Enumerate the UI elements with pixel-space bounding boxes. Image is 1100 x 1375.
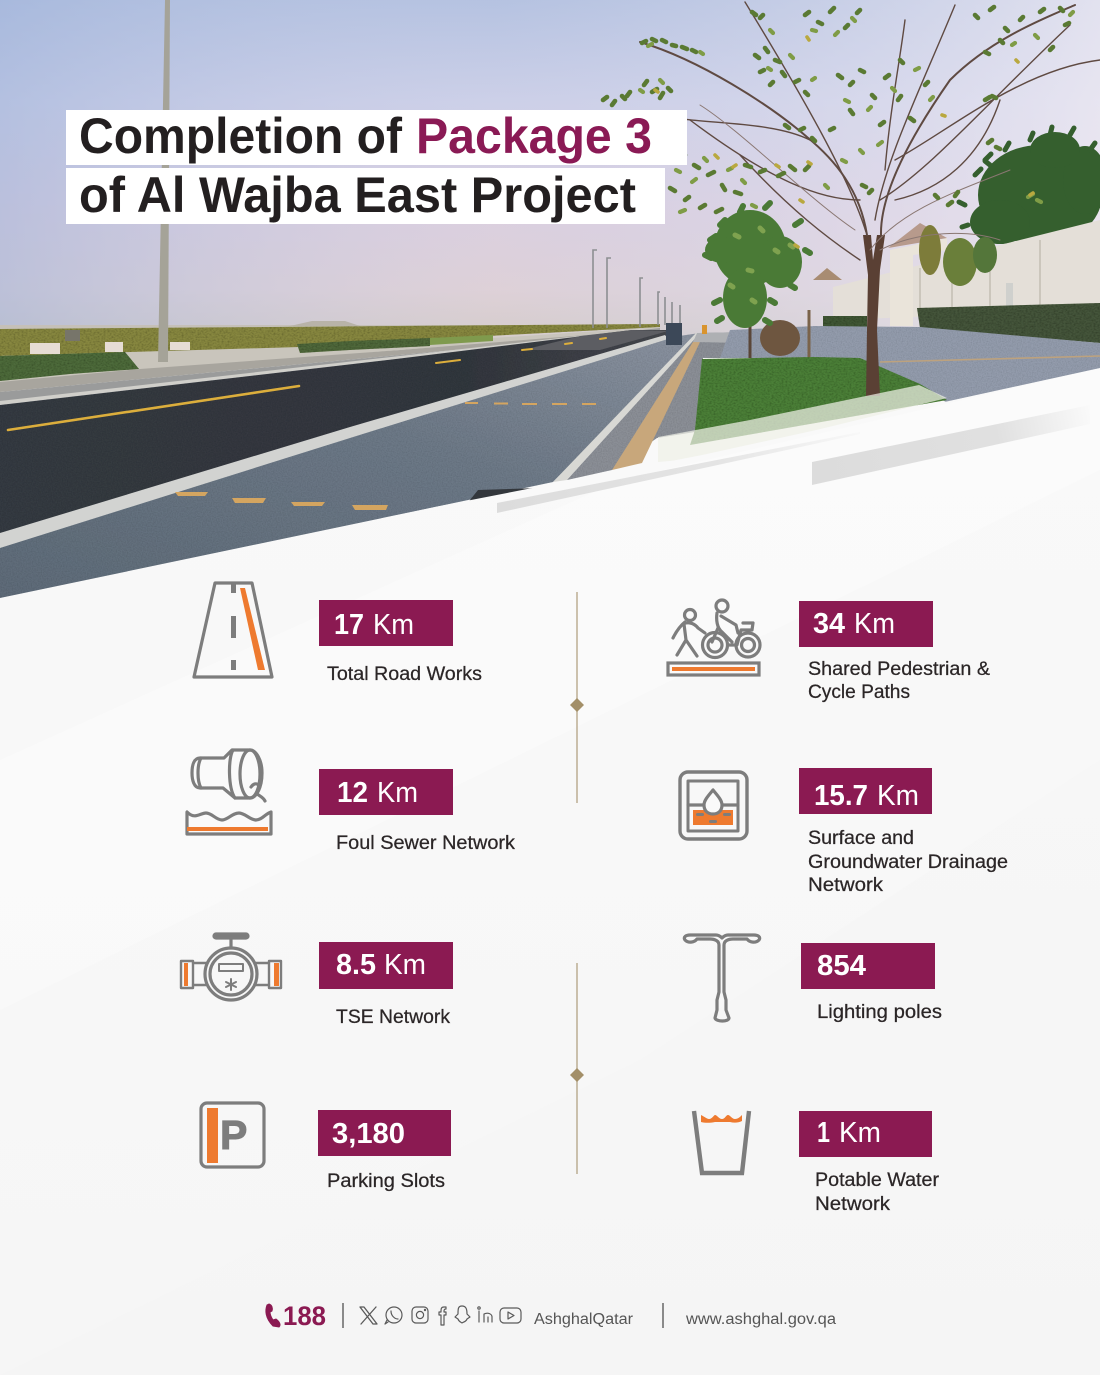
distant building line [0,321,660,330]
value box: Km [373,609,414,641]
title line 1: Completion of [79,108,402,164]
value box: Km [854,608,895,640]
label [808,828,1008,896]
value box: Km [839,1117,881,1149]
title [66,108,687,224]
value box: 17 [334,609,364,641]
title line 2: of Al Wajba East Project [79,167,636,223]
asphalt road [0,330,668,535]
tall lamp post [158,0,170,362]
value box [318,1110,451,1156]
value box [801,943,935,989]
value box: 854 [817,950,866,982]
stat: shared pedestrian and cycle paths [668,600,990,703]
social icons [360,1306,521,1325]
value box: 1 [817,1117,830,1149]
label: Shared Pedestrian & [808,659,990,680]
road edge white line [0,335,668,548]
brick cycle lane [0,333,700,600]
title line 1: Package 3 [416,108,652,164]
icon: parking sign: P [220,1112,247,1158]
stat: potable water network [694,1111,940,1215]
label [808,659,990,703]
icon: road [194,583,272,677]
value box [799,601,933,647]
icon: pedestrian and cyclist [668,600,760,675]
icon: water glass [694,1111,749,1173]
icon: water valve meter [181,934,281,1000]
translucent strip over planter [658,385,947,462]
tree branches [640,2,1100,260]
stat: lighting poles [684,935,942,1023]
footer [266,1301,836,1331]
yellow leaves [655,37,1033,247]
label [815,1170,940,1215]
label: Total Road Works [327,664,482,685]
value box [799,1111,932,1157]
climbing vines on wall [919,225,997,286]
stat: surface and groundwater drainage [680,768,1008,896]
icon: drainage section [680,772,747,839]
tree leaves [603,7,1073,247]
label: TSE Network [336,1007,450,1028]
icon: light pole [684,935,760,1021]
icon: parking sign [201,1103,264,1167]
label: Surface and [808,828,914,849]
lane orange dashes [175,402,596,510]
label: Network [808,875,884,896]
grate [470,488,532,500]
title line 1 [66,108,687,165]
label: Network [815,1194,891,1215]
label: Lighting poles [817,1002,942,1023]
value box [319,600,453,646]
white diagonal band strips [497,405,1090,513]
value box: 3,180 [332,1118,405,1150]
roadside hedges [0,324,660,405]
label: Foul Sewer Network [336,833,516,854]
value box: 15.7 [814,780,868,812]
centre line [8,338,606,430]
value box: Km [377,777,418,809]
distant street poles [593,250,680,328]
hero photo of the road [0,0,1100,600]
dividers [570,592,584,1174]
value box: Km [877,780,919,812]
label: Potable Water [815,1170,940,1191]
value box [799,768,932,814]
planter with groundcover [690,357,947,445]
stat: total road works [194,583,482,685]
value box: 34 [813,608,845,640]
value box: Km [384,949,426,981]
handle: AshghalQatar [534,1311,633,1328]
stat: TSE network [181,934,453,1028]
tree trunk [863,235,885,396]
light leaves [640,12,1073,212]
far lighter road section [523,330,668,350]
value box [319,769,453,815]
dark green tree behind wall [959,127,1100,245]
sidewalk with tan tile stripe [553,332,747,482]
label: Cycle Paths [808,682,910,703]
icon: phone [266,1304,280,1327]
stat: parking slots [201,1103,451,1192]
hotline number: 188 [283,1301,326,1331]
value box: 12 [337,777,368,809]
icon: sewer pipe [187,750,271,834]
value box [319,942,453,989]
stat: foul sewer network [187,750,516,854]
label: Groundwater Drainage [808,852,1008,873]
wall and plaza [720,220,1100,404]
bin and small tree [666,203,810,380]
website: www.ashghal.gov.qa [685,1311,836,1328]
value box: 8.5 [336,949,376,981]
dark leaves [603,7,1069,212]
label: Parking Slots [327,1171,445,1192]
sky [0,0,1100,340]
